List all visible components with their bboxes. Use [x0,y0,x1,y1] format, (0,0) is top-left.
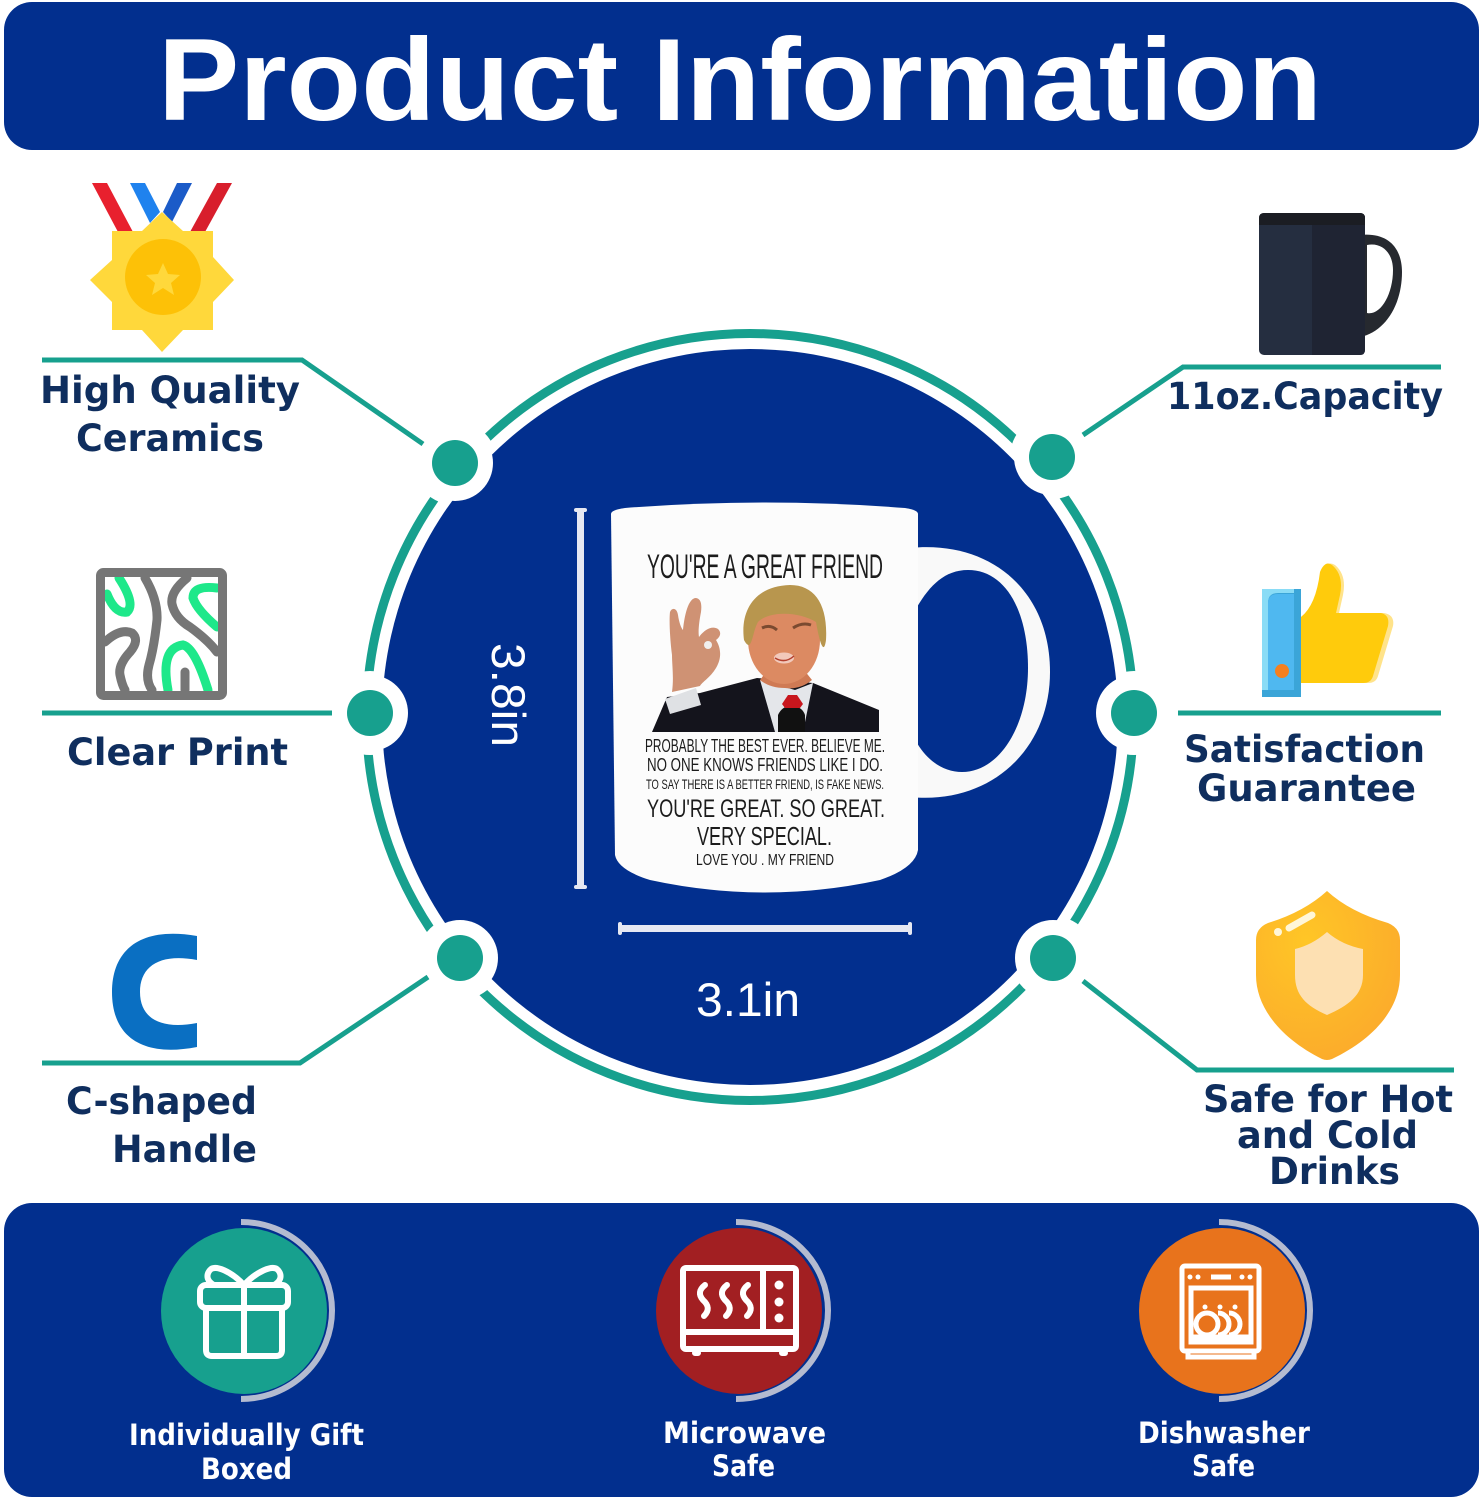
width dimension [618,922,912,1026]
height label: 3.8in [482,643,535,747]
mug headline: YOU'RE A GREAT FRIEND [647,548,883,586]
mug message: PROBABLY THE BEST EVER. BELIEVE ME. [645,736,885,756]
feature: satisfaction guarantee [1184,564,1425,810]
label: Clear Print [67,731,288,774]
badge: microwave safe [656,1222,828,1483]
label [40,369,300,460]
mug message: TO SAY THERE IS A BETTER FRIEND, IS FAKE NEWS. [646,776,884,792]
label [1203,1078,1453,1193]
width label: 3.1in [696,973,800,1026]
portrait [652,585,879,732]
feature: 11oz capacity [1167,213,1443,418]
icon: print swatch [100,572,222,696]
icon: microwave [683,1268,796,1353]
label: 11oz.Capacity [1167,375,1443,418]
label [66,1080,257,1171]
feature: clear print [67,572,288,774]
label: Dishwasher [1138,1416,1311,1450]
footer panel [4,1203,1479,1497]
label: Satisfaction [1184,728,1425,771]
mug message [645,736,885,869]
icon: gift box [200,1268,288,1356]
feature: high quality ceramics [40,183,300,460]
label: Guarantee [1197,767,1416,810]
height dimension [482,508,587,889]
central circle diagram [328,334,1176,1100]
label [129,1418,364,1486]
mug message: VERY SPECIAL. [697,821,832,851]
label: Microwave [663,1416,826,1450]
label: Safe [712,1449,775,1483]
label: C-shaped [66,1080,257,1123]
label: Safe [1192,1449,1255,1483]
mug handle [910,547,1050,798]
icon: dark mug [1259,213,1402,355]
header banner [4,2,1479,150]
label: Drinks [1269,1150,1400,1193]
label: Ceramics [76,417,264,460]
title: Product Information [158,14,1322,145]
icon: letter c [112,934,197,1050]
label: High Quality [40,369,300,412]
mug message: YOU'RE GREAT. SO GREAT. [647,795,885,823]
label: and Cold [1237,1114,1418,1157]
icon: dishwasher [1182,1266,1259,1357]
label [663,1416,826,1483]
mug message: LOVE YOU . MY FRIEND [696,852,834,869]
feature: safe for hot and cold drinks [1203,891,1453,1193]
label: Individually Gift [129,1418,364,1452]
mug body [611,502,918,892]
feature: c-shaped handle [66,934,257,1171]
label: Safe for Hot [1203,1078,1453,1121]
label: Boxed [201,1452,292,1486]
mug photo [611,502,1050,892]
badge: dishwasher safe [1138,1222,1311,1483]
icon: shield [1256,891,1400,1060]
label [1184,728,1425,810]
label [1138,1416,1311,1483]
icon: thumbs up [1262,564,1393,697]
badge: individually gift boxed [129,1222,364,1486]
label: Handle [112,1128,257,1171]
icon: medal [90,183,234,352]
mug message: NO ONE KNOWS FRIENDS LIKE I DO. [647,755,883,775]
